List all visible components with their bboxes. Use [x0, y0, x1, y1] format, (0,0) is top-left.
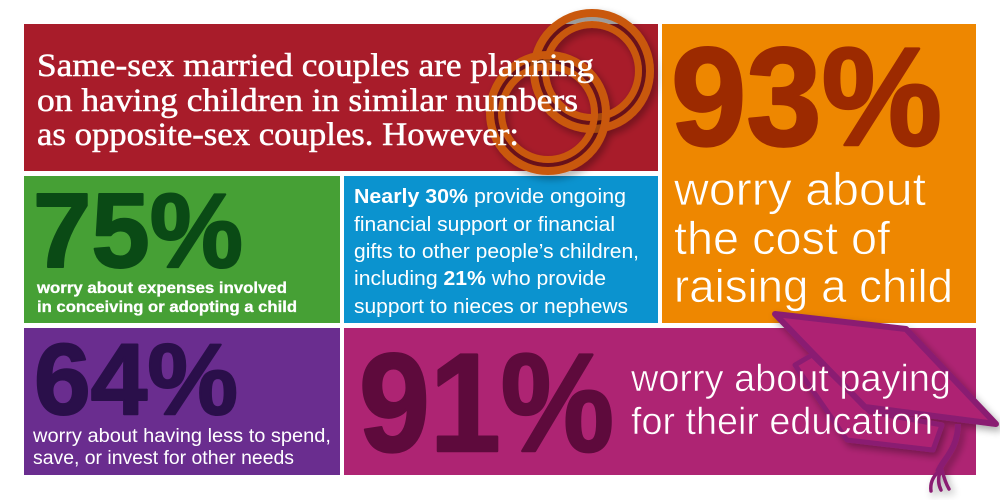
caption: paying for education: [630, 358, 951, 443]
caption: cost of raising a child: raising a child: [674, 260, 953, 312]
caption: expenses: in conceiving or adopting a child: [37, 299, 297, 316]
heading text: as opposite-sex couples. However:: [37, 117, 519, 153]
panel: orange background: [662, 24, 976, 323]
support text: support to nieces or nephews: [354, 296, 628, 318]
panel: intro background: [24, 24, 658, 171]
statistic 91%: 91%: [359, 324, 614, 481]
statistic 75%: 75%: [33, 172, 243, 290]
caption: less to spend: worry about having less to spend,: [32, 426, 331, 447]
caption: less to spend: save, or invest for other needs: [33, 448, 294, 469]
statistic 93%: 93%: [671, 18, 942, 175]
statistic 64%: 64%: [34, 324, 238, 436]
support text: financial support or financial: [354, 214, 615, 236]
panel: blue background: [344, 176, 658, 323]
heading text: Same-sex married couples are planning: [37, 48, 594, 84]
caption: cost of raising a child: the cost of: [674, 212, 890, 264]
support text: Nearly 30% provide ongoing: [354, 186, 626, 208]
caption: expenses: [36, 280, 297, 316]
heading text: [37, 48, 594, 153]
support text: [354, 186, 639, 318]
heading text: on having children in similar numbers: [37, 83, 578, 119]
panel: purple background: [24, 328, 340, 475]
support text: gifts to other people’s children,: [354, 241, 639, 263]
caption: less to spend: [32, 426, 331, 469]
caption: cost of raising a child: worry about: [673, 163, 926, 215]
caption: paying for education: worry about paying: [630, 358, 951, 400]
icon: graduation cap: [775, 314, 996, 491]
panel: green background: [24, 176, 340, 323]
caption: cost of raising a child: [673, 163, 953, 312]
panel: magenta background: [344, 328, 976, 475]
caption: paying for education: for their education: [631, 401, 933, 443]
caption: expenses: worry about expenses involved: [36, 280, 287, 297]
icon: interlocked rings: [490, 13, 650, 171]
support text: including 21% who provide: [354, 268, 606, 290]
